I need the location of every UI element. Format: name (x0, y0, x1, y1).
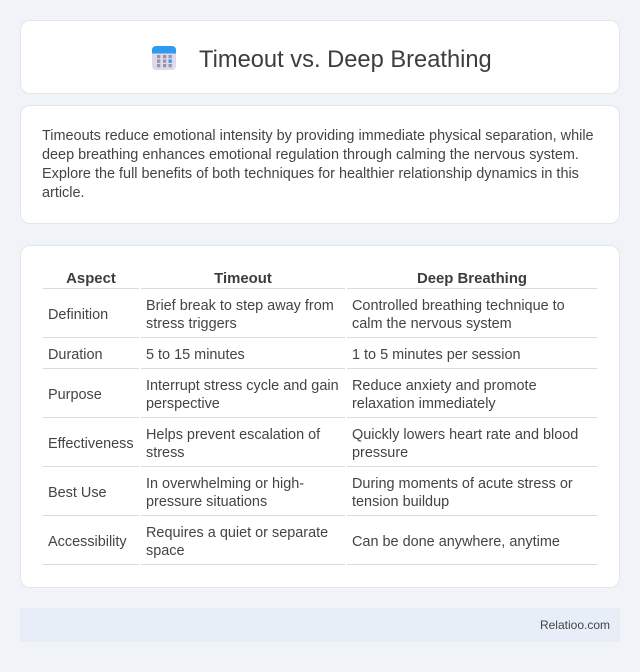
text: intro paragraph: Explore the full benefits of both techniques for healthier relationship dynamics in this (42, 166, 579, 182)
row: purpose: Reduce anxiety and promote (352, 378, 537, 394)
footer (20, 608, 620, 642)
row: accessibility: Accessibility (48, 534, 127, 550)
text: intro paragraph: deep breathing enhances emotional regulation through calming the nervous system. (42, 147, 579, 163)
title: Timeout vs. Deep Breathing (199, 47, 492, 73)
footer text: Relatioo.com (540, 618, 610, 632)
row: accessibility: Requires a quiet or separate (146, 525, 328, 541)
row: best use: During moments of acute stress or (352, 476, 573, 492)
row: effectiveness (48, 427, 578, 461)
table header (66, 271, 527, 287)
row: definition: Controlled breathing technique to (352, 298, 565, 314)
row: accessibility (48, 525, 560, 559)
table header: Deep Breathing (417, 271, 527, 287)
row: effectiveness: Quickly lowers heart rate and blood (352, 427, 578, 443)
row: best use: In overwhelming or high- (146, 476, 304, 492)
row: definition: calm the nervous system (352, 316, 512, 332)
row: best use: pressure situations (146, 494, 267, 510)
panel: intro (20, 105, 620, 224)
text: intro paragraph: Timeouts reduce emotional intensity by providing immediate physical separation, while (42, 128, 594, 144)
row: duration: Duration (48, 347, 103, 363)
panel: header (20, 20, 620, 94)
row: purpose (48, 378, 537, 412)
row: effectiveness: Helps prevent escalation of (146, 427, 320, 443)
text: intro paragraph (42, 128, 594, 201)
row: definition: stress triggers (146, 316, 237, 332)
icon: calendar (152, 46, 176, 70)
text: intro paragraph: article. (42, 185, 85, 201)
table header: Timeout (214, 271, 272, 287)
row: definition: Brief break to step away from (146, 298, 334, 314)
row: purpose: relaxation immediately (352, 396, 496, 412)
row: definition: Definition (48, 307, 108, 323)
row: definition (48, 298, 565, 332)
row: best use: tension buildup (352, 494, 449, 510)
row: effectiveness: stress (146, 445, 185, 461)
row: effectiveness: Effectiveness (48, 436, 134, 452)
row: duration: 5 to 15 minutes (146, 347, 245, 363)
table header: Aspect (66, 271, 116, 287)
row: best use (48, 476, 573, 510)
row: best use: Best Use (48, 485, 107, 501)
row: purpose: perspective (146, 396, 220, 412)
row: effectiveness: pressure (352, 445, 408, 461)
row: accessibility: Can be done anywhere, anytime (352, 534, 560, 550)
row: purpose: Interrupt stress cycle and gain (146, 378, 339, 394)
row: duration (48, 347, 521, 363)
row: purpose: Purpose (48, 387, 102, 403)
panel: comparison table (20, 245, 620, 588)
row: duration: 1 to 5 minutes per session (352, 347, 521, 363)
row: accessibility: space (146, 543, 185, 559)
